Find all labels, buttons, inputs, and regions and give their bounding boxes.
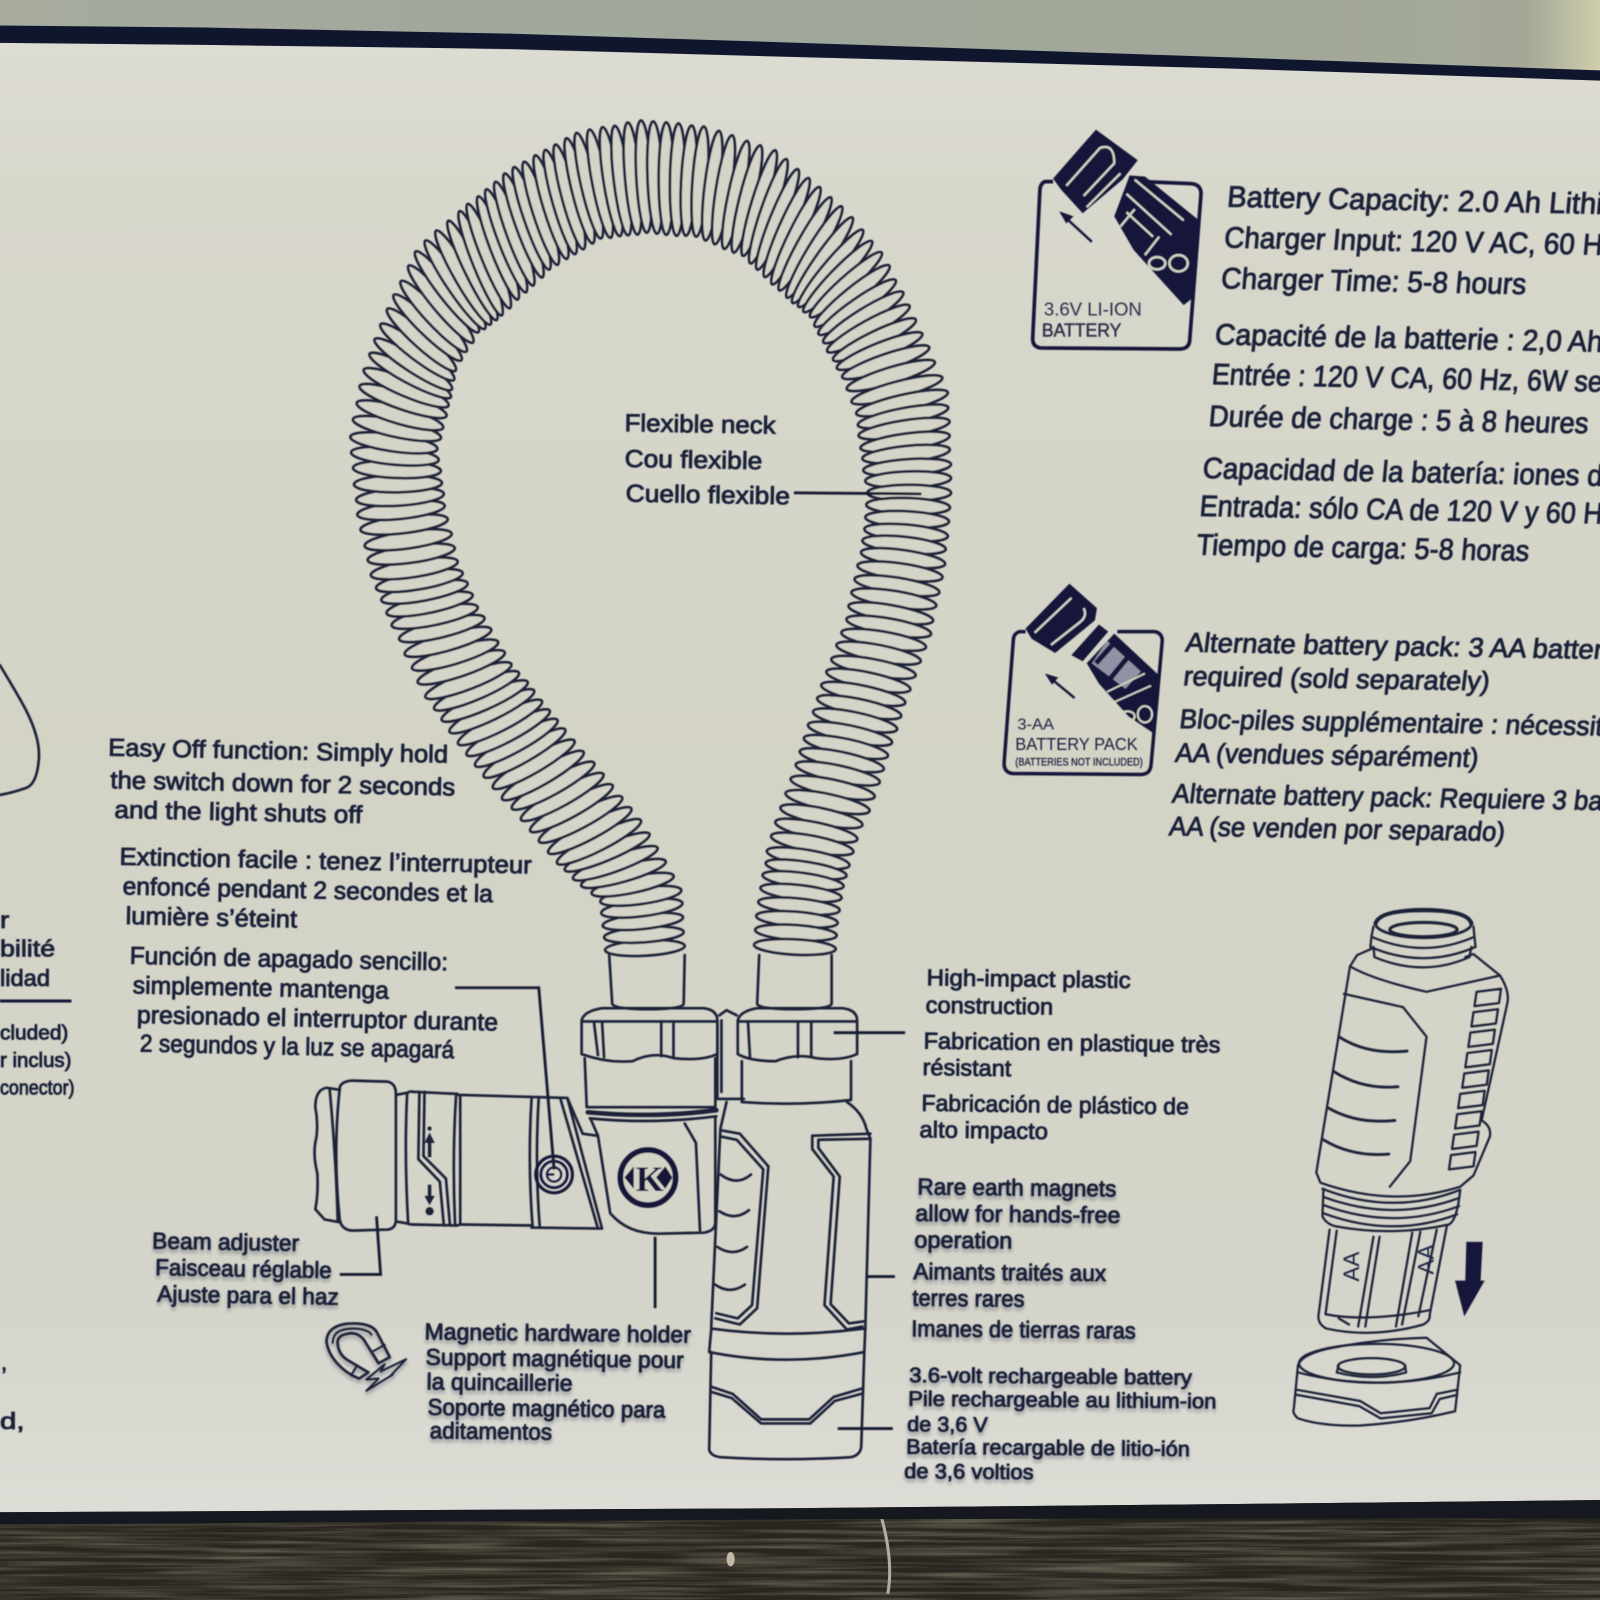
body outline <box>1316 948 1508 1197</box>
high-impact plastic text: High-impact plastic <box>926 964 1131 993</box>
cropped left text <box>0 907 74 1434</box>
flashlight head and connectors <box>315 955 857 1234</box>
rechargeable battery text: Batería recargable de litio-ión <box>906 1436 1190 1461</box>
rechargeable battery text: de 3,6 voltios <box>904 1460 1034 1484</box>
rechargeable battery text: 3.6-volt rechargeable battery <box>909 1364 1193 1390</box>
battery specifications text: Tiempo de carga: 5-8 horas <box>1195 529 1531 568</box>
cropped left text: r inclus) <box>0 1050 71 1072</box>
grip ribs <box>715 1174 751 1290</box>
battery holder cage <box>1318 1226 1447 1333</box>
high-impact plastic text: alto impacto <box>919 1116 1048 1144</box>
flexible neck label: Cuello flexible <box>625 481 790 510</box>
beam adjuster text: Faisceau réglable <box>155 1254 332 1283</box>
rare earth magnets text <box>911 1173 1136 1344</box>
magnetic hardware holder text: Soporte magnético para <box>427 1394 666 1423</box>
switch section <box>530 1097 602 1229</box>
handle body <box>709 1102 870 1459</box>
alternate battery pack text: Bloc-piles supplémentaire : nécessit <box>1178 703 1600 741</box>
leader: rechargeable battery <box>838 1427 893 1430</box>
navy box top edge <box>0 26 1600 81</box>
beam adjuster text <box>152 1227 339 1310</box>
battery specifications text: Charger Time: 5-8 hours <box>1220 262 1528 301</box>
easy off text block: enfoncé pendant 2 secondes et la <box>122 873 494 908</box>
magnetic hardware holder text: la quincaillerie <box>426 1368 573 1396</box>
rare earth magnets text: Rare earth magnets <box>917 1173 1117 1201</box>
magnetic hardware holder text: aditamentos <box>430 1417 552 1445</box>
high-impact plastic text <box>919 964 1221 1144</box>
icon: power button <box>536 1156 572 1193</box>
side ribs <box>1449 989 1501 1169</box>
leader: plastic construction <box>834 1031 905 1034</box>
K head housing <box>591 1118 715 1234</box>
side panel <box>1344 994 1427 1187</box>
alternate battery pack text: AA (vendues séparément) <box>1174 737 1481 773</box>
easy off text block <box>108 735 532 1064</box>
background wall <box>0 0 1600 92</box>
zoom ring with arrows <box>396 1091 460 1226</box>
easy off text block: presionado el interruptor durante <box>137 1002 498 1037</box>
leader: flexible neck <box>794 493 921 494</box>
cropped left text: r <box>0 907 10 933</box>
high-impact plastic text: Fabrication en plastique très <box>923 1027 1221 1058</box>
base cap <box>1293 1338 1460 1426</box>
rechargeable battery text: de 3,6 V <box>907 1413 988 1437</box>
beam arrows icon <box>424 1127 435 1215</box>
high-impact plastic text: résistant <box>922 1054 1012 1081</box>
handle outline <box>711 1102 870 1329</box>
icon: K logo <box>620 1150 676 1205</box>
rare earth magnets text: allow for hands-free <box>915 1200 1121 1228</box>
easy off text block: Easy Off function: Simply hold <box>108 735 448 769</box>
alternate battery pack text: Alternate battery pack: 3 AA batter <box>1184 627 1600 665</box>
icon: magnet with spark <box>327 1323 406 1391</box>
icon: 3.6V Li-ion battery <box>1033 130 1201 349</box>
leader: easy off switch <box>455 988 554 1169</box>
rechargeable battery text: Pile rechargeable au lithium-ion <box>908 1388 1216 1413</box>
battery specifications text: Battery Capacity: 2.0 Ah Lithi <box>1226 181 1600 221</box>
left neck tube <box>609 955 685 1009</box>
cropped left text: lidad <box>0 965 50 991</box>
easy off text block: lumière s’éteint <box>125 903 298 934</box>
cropped left text: conector) <box>0 1077 74 1099</box>
magnetic hardware holder text <box>424 1318 691 1445</box>
navy box bottom shadow edge <box>0 1500 1600 1524</box>
wood table surface <box>0 1490 1600 1600</box>
flashlight bezel <box>336 1081 396 1231</box>
lower threads <box>1322 1189 1460 1231</box>
right grip <box>812 1134 870 1330</box>
cropped left outline shape <box>0 665 39 795</box>
shoulder <box>1350 966 1500 992</box>
icon: 3-AA battery pack: 3-AA <box>1017 717 1055 734</box>
AA battery labels: AA <box>1339 1252 1364 1282</box>
icon: K logo: K <box>636 1159 664 1199</box>
leader: rare earth magnets <box>866 1275 895 1278</box>
battery specifications text <box>1195 181 1600 568</box>
beam adjuster text: Ajuste para el haz <box>157 1281 339 1310</box>
flashlight lens end <box>315 1088 341 1222</box>
easy off text block: the switch down for 2 seconds <box>110 767 455 801</box>
easy off text block: simplemente mantenga <box>133 972 390 1005</box>
easy off text block: and the light shuts off <box>114 797 363 829</box>
cropped left text: cluded) <box>0 1022 68 1044</box>
easy off text block: Función de apagado sencillo: <box>129 943 448 976</box>
arrow: pull battery down <box>1455 1242 1485 1316</box>
alternate battery pack text <box>1168 627 1600 847</box>
beam adjuster text: Beam adjuster <box>152 1227 300 1256</box>
rechargeable battery text <box>904 1364 1216 1484</box>
flexible neck label <box>624 410 790 510</box>
icon: 3-AA battery pack: BATTERY PACK <box>1015 734 1138 754</box>
leader: beam adjuster <box>340 1216 381 1274</box>
alternate battery pack text: required (sold separately) <box>1182 660 1492 697</box>
easy off text block: 2 segundos y la luz se apagará <box>140 1031 455 1064</box>
magnetic hardware holder text: Support magnétique pour <box>425 1344 684 1373</box>
right neck tube <box>757 955 832 1009</box>
cropped left text: d, <box>0 1408 24 1434</box>
flexible neck coil <box>349 120 951 958</box>
rare earth magnets text: Imanes de tierras raras <box>911 1315 1136 1344</box>
battery pack illustration <box>1293 909 1508 1426</box>
cropped left text: , <box>1 1349 7 1375</box>
head band <box>588 1110 716 1115</box>
icon: 3-AA battery pack: (BATTERIES NOT INCLUDED) <box>1015 756 1143 768</box>
rare earth magnets text: terres rares <box>912 1285 1025 1312</box>
grip grooves <box>1323 1037 1407 1155</box>
flexible neck label: Flexible neck <box>624 410 777 440</box>
alternate battery pack text: AA (se venden por separado) <box>1168 810 1507 847</box>
barrel <box>460 1095 532 1226</box>
magnetic hardware holder text: Magnetic hardware holder <box>424 1318 691 1348</box>
rare earth magnets text: Aimants traités aux <box>913 1258 1107 1286</box>
threaded top opening <box>1376 910 1471 923</box>
collars and centre bracket <box>585 1010 851 1107</box>
left hex nut <box>582 1008 717 1062</box>
high-impact plastic text: Fabricación de plástico de <box>921 1090 1189 1119</box>
icon: 3.6V Li-ion battery: 3.6V LI-ION <box>1044 298 1142 319</box>
left grip <box>715 1131 768 1324</box>
battery cap <box>709 1329 865 1459</box>
easy off text block: Extinction facile : tenez l’interrupteur <box>119 844 532 879</box>
rare earth magnets text: operation <box>914 1226 1012 1253</box>
leader: magnetic holder <box>654 1237 657 1308</box>
flexible neck label: Cou flexible <box>624 446 763 475</box>
right hex nut <box>738 1008 857 1061</box>
icon: 3.6V Li-ion battery: BATTERY <box>1042 320 1121 341</box>
icon: 3-AA battery pack <box>1004 584 1162 774</box>
cropped left text: bilité <box>0 936 55 962</box>
battery pack illustration: AA <box>1414 1245 1439 1274</box>
high-impact plastic text: construction <box>925 992 1053 1020</box>
